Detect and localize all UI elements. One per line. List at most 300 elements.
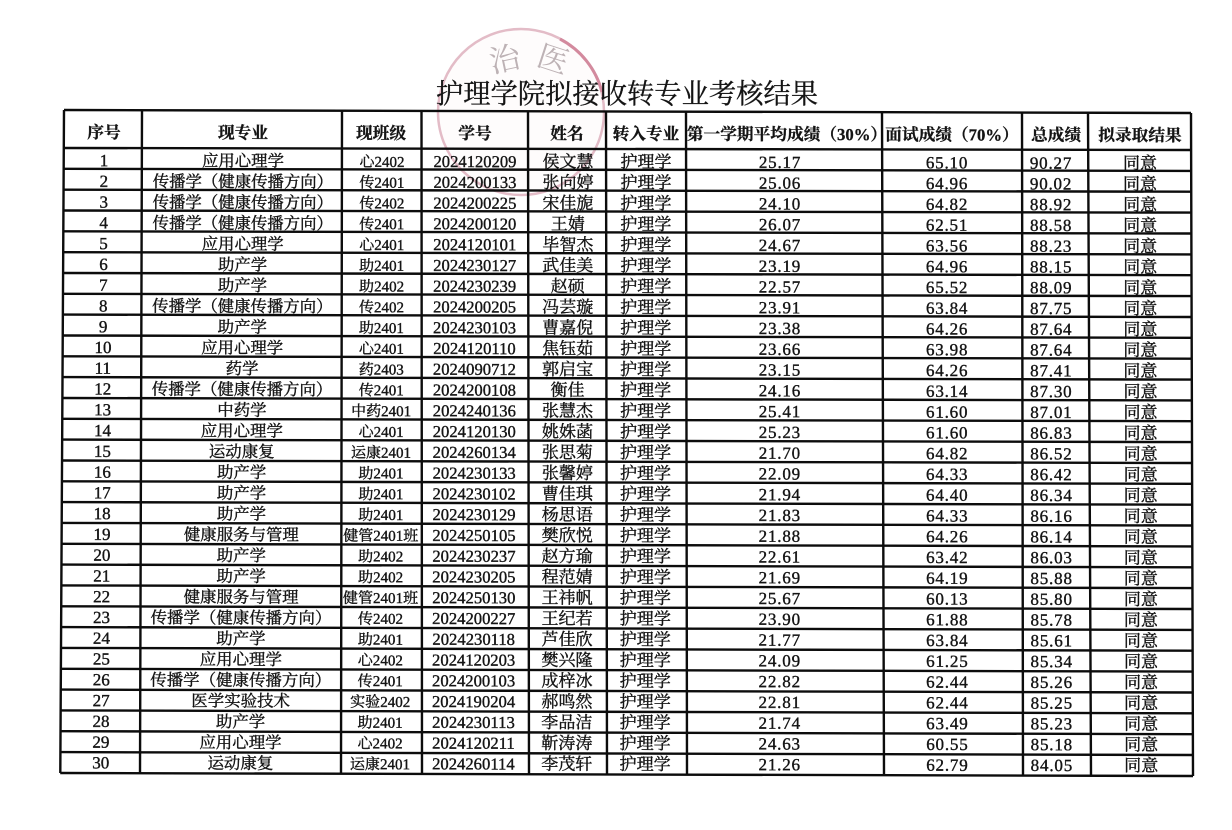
row 30: 30 [92, 753, 109, 772]
row 7: 同意 [1123, 278, 1157, 298]
row 12: 12 [94, 380, 111, 399]
row 16: 22.09 [759, 464, 801, 484]
row 17: 护理学 [620, 485, 671, 504]
row 30 [92, 753, 1158, 775]
row 25 [93, 650, 1158, 671]
row 2: 64.96 [926, 174, 968, 193]
row 27: 护理学 [620, 693, 671, 712]
row 14: 护理学 [620, 422, 671, 442]
row 16 [94, 462, 1158, 484]
row 25: 心2402 [358, 652, 403, 669]
row 14: 2024120130 [433, 422, 516, 441]
row 13: 中药学 [217, 401, 267, 420]
row 29: 85.18 [1031, 735, 1073, 754]
header row: 学号 [458, 124, 492, 143]
row 20: 22.61 [759, 548, 801, 567]
official seal: 治 [486, 39, 525, 80]
row 2: 传播学（健康传播方向） [153, 172, 333, 191]
row 19: 樊欣悦 [542, 526, 593, 545]
row 1: 护理学 [621, 152, 671, 172]
row 5: 2024120101 [433, 235, 516, 254]
row 6: 武佳美 [542, 256, 593, 275]
row 1: 侯文慧 [543, 152, 593, 171]
row 25: 2024120203 [432, 650, 515, 670]
row 28: 85.23 [1031, 714, 1073, 733]
row 17: 86.34 [1030, 486, 1073, 505]
row 15 [94, 442, 1158, 464]
row 21: 护理学 [620, 568, 671, 587]
row 17: 17 [94, 483, 111, 502]
row 3: 2024200225 [433, 194, 516, 213]
row 3: 同意 [1123, 195, 1157, 214]
row 21: 21 [93, 566, 110, 585]
row 21: 同意 [1124, 569, 1158, 588]
row 2: 90.02 [1030, 174, 1072, 193]
row 25: 护理学 [620, 651, 671, 670]
row 28: 同意 [1124, 715, 1158, 734]
row 10: 87.64 [1030, 341, 1072, 360]
row 12: 63.14 [926, 382, 968, 401]
row 29: 靳涛涛 [541, 734, 592, 753]
row 25: 樊兴隆 [541, 651, 593, 670]
row 1: 同意 [1123, 154, 1157, 173]
row 4: 4 [99, 213, 108, 232]
row 24: 助产学 [216, 629, 266, 648]
row 14: 25.23 [759, 423, 801, 442]
row 22: 健管2401班 [343, 590, 418, 607]
row 1: 2024120209 [434, 152, 516, 171]
row 10: 63.98 [926, 340, 968, 359]
row 21: 程范婧 [542, 568, 593, 587]
row 29: 同意 [1124, 735, 1158, 754]
row 19: 19 [93, 525, 111, 544]
row 3: 护理学 [620, 194, 671, 213]
row 8: 传播学（健康传播方向） [152, 297, 333, 316]
row 4 [99, 213, 1157, 235]
row 16: 64.33 [926, 465, 968, 484]
row 24: 63.84 [926, 631, 969, 650]
row 17: 64.40 [926, 486, 968, 505]
row 10: 护理学 [620, 339, 671, 359]
row 30: 2024260114 [432, 754, 515, 774]
row 3: 88.92 [1030, 195, 1072, 214]
row 16: 同意 [1124, 465, 1158, 484]
row 29: 心2402 [357, 735, 403, 752]
row 18: 杨思语 [542, 504, 593, 524]
row 12 [94, 380, 1157, 401]
row 28: 2024230113 [432, 713, 515, 732]
row 22: 85.80 [1030, 590, 1073, 609]
row 10 [94, 338, 1157, 360]
row 9: 23.38 [759, 319, 801, 338]
row 6: 2024230127 [433, 256, 516, 275]
results table [60, 110, 1193, 776]
row 25: 61.25 [926, 652, 969, 671]
row 11: 11 [95, 359, 111, 378]
row 15: 运动康复 [209, 442, 275, 461]
row 21: 助产学 [217, 567, 266, 586]
row 30: 21.26 [758, 755, 801, 774]
row 11: 64.26 [926, 361, 968, 380]
row 22: 22 [93, 587, 110, 606]
row 7: 赵硕 [551, 277, 586, 296]
row 21 [93, 566, 1158, 588]
row 18: 助2401 [358, 507, 403, 524]
row 8: 护理学 [620, 298, 671, 317]
row 26: 2024200103 [432, 671, 515, 690]
row 29: 2024120211 [432, 734, 515, 753]
row 2: 25.06 [759, 174, 801, 193]
row 20: 63.42 [926, 548, 968, 567]
header row: 面试成绩（70%） [885, 124, 1019, 145]
row 20: 助2402 [358, 548, 403, 566]
row 30: 84.05 [1031, 756, 1073, 775]
header row: 序号 [87, 123, 121, 142]
row 30: 同意 [1124, 756, 1158, 775]
row 20: 同意 [1124, 548, 1158, 568]
row 2: 同意 [1123, 175, 1157, 194]
row 10: 10 [94, 338, 112, 357]
row 4: 同意 [1123, 216, 1157, 235]
row 21: 21.69 [759, 568, 801, 587]
row 21: 85.88 [1030, 569, 1073, 588]
row 22: 2024250130 [432, 588, 515, 607]
row 5: 5 [99, 234, 108, 253]
row 12: 2024200108 [433, 380, 516, 400]
row 26: 护理学 [620, 672, 671, 691]
row 8: 2024200205 [433, 297, 516, 317]
row 22: 健康服务与管理 [184, 587, 299, 607]
row 21: 助2402 [358, 569, 403, 586]
row 14: 姚姝菡 [542, 421, 593, 441]
row 3: 24.10 [759, 194, 801, 214]
row 27: 同意 [1124, 694, 1158, 713]
row 6: 64.96 [926, 257, 968, 276]
row 4: 传2401 [359, 216, 404, 233]
row 20: 赵方瑜 [542, 547, 593, 566]
header row: 第一学期平均成绩（30%） [687, 124, 887, 144]
row 18 [94, 503, 1158, 526]
row 11: 2024090712 [433, 360, 516, 379]
row 29: 60.55 [926, 735, 969, 754]
row 26: 22.82 [759, 672, 801, 691]
row 12: 衡佳 [551, 381, 585, 400]
row 24: 24 [93, 629, 110, 648]
row 11: 药学 [226, 359, 259, 378]
row 19: 健管2401班 [343, 528, 418, 545]
row 17: 同意 [1124, 486, 1158, 505]
row 20: 2024230237 [432, 547, 516, 566]
row 4: 88.58 [1030, 216, 1072, 235]
row 14: 心2401 [359, 424, 404, 441]
row 27: 实验2402 [350, 694, 410, 711]
row 1 [100, 151, 1157, 173]
row 27: 85.25 [1031, 694, 1073, 713]
row 26: 26 [93, 670, 110, 689]
row 16: 助2401 [358, 465, 403, 482]
row 3: 64.82 [926, 195, 968, 214]
row 24: 助2401 [358, 632, 403, 649]
row 9: 87.64 [1030, 320, 1072, 339]
row 16: 护理学 [620, 464, 671, 483]
row 24: 芦佳欣 [541, 630, 593, 649]
row 13: 张慧杰 [542, 402, 594, 421]
row 9: 同意 [1123, 320, 1157, 339]
row 14: 61.60 [926, 423, 968, 442]
row 5: 心2401 [359, 237, 404, 254]
row 27: 27 [93, 691, 110, 710]
row 18: 2024230129 [432, 505, 516, 524]
row 3: 3 [100, 193, 108, 212]
row 16: 86.42 [1030, 465, 1073, 484]
row 15: 运康2401 [351, 444, 411, 462]
row 8: 同意 [1123, 299, 1157, 318]
row 22 [93, 587, 1158, 609]
row 22: 同意 [1124, 590, 1158, 609]
row 23: 传播学（健康传播方向） [151, 608, 331, 628]
row 19: 21.88 [759, 527, 801, 546]
row 12: 同意 [1123, 382, 1157, 401]
row 1: 65.10 [926, 153, 968, 172]
row 28: 28 [92, 712, 110, 731]
row 4: 26.07 [759, 215, 801, 234]
row 8: 63.84 [926, 299, 968, 318]
row 18: 86.16 [1030, 507, 1073, 526]
row 13: 61.60 [926, 403, 968, 422]
row 19: 86.14 [1030, 527, 1073, 547]
row 8: 87.75 [1030, 299, 1072, 318]
row 8: 传2402 [359, 299, 404, 316]
row 13: 87.01 [1030, 403, 1073, 422]
row 30: 62.79 [926, 756, 969, 775]
row 1: 1 [100, 151, 108, 170]
row 5 [99, 234, 1157, 256]
header row: 总成绩 [1031, 125, 1081, 145]
row 5: 88.23 [1030, 237, 1072, 256]
row 11: 同意 [1123, 362, 1157, 381]
row 23: 传2402 [358, 611, 403, 628]
row 2 [100, 172, 1157, 194]
row 14 [94, 420, 1158, 443]
row 9: 护理学 [620, 319, 671, 338]
row 26: 同意 [1124, 673, 1158, 692]
row 30: 运动康复 [207, 754, 273, 773]
row 27 [93, 691, 1158, 713]
row 13: 同意 [1124, 403, 1158, 422]
row 17: 2024230102 [433, 484, 516, 504]
row 9 [99, 317, 1157, 339]
row 27: 22.81 [759, 693, 801, 712]
row 12: 护理学 [620, 381, 671, 400]
row 7: 2024230239 [433, 277, 516, 296]
row 28: 李品洁 [541, 713, 592, 732]
row 28: 助产学 [216, 712, 265, 731]
row 17 [94, 483, 1158, 505]
row 26: 62.44 [926, 673, 969, 692]
row 7 [99, 276, 1157, 298]
row 30: 李茂轩 [541, 755, 592, 774]
row 14: 86.83 [1030, 424, 1073, 443]
row 2: 传2401 [359, 175, 404, 192]
row 13: 13 [94, 400, 111, 419]
row 6: 助2401 [359, 258, 404, 275]
row 19: 健康服务与管理 [184, 525, 299, 544]
row 24: 21.77 [759, 631, 801, 650]
row 6: 23.19 [759, 257, 801, 276]
row 11: 药2403 [359, 360, 404, 379]
row 29: 应用心理学 [199, 733, 282, 752]
row 8: 8 [99, 296, 107, 315]
row 30: 护理学 [620, 755, 671, 774]
header row: 姓名 [550, 123, 584, 143]
row 20 [93, 546, 1158, 568]
row 5: 63.56 [926, 236, 968, 255]
header row: 现班级 [356, 124, 406, 143]
row 16: 张馨婷 [542, 463, 593, 483]
row 28: 63.49 [926, 714, 969, 733]
row 29: 29 [92, 733, 109, 752]
row 8: 23.91 [759, 298, 801, 317]
row 5: 24.67 [759, 236, 801, 255]
row 13: 护理学 [620, 402, 671, 421]
row 15: 86.52 [1030, 444, 1073, 463]
row 7: 65.52 [926, 278, 968, 297]
row 26: 成梓冰 [541, 672, 593, 691]
row 9: 助产学 [218, 318, 267, 337]
row 10: 23.66 [759, 340, 801, 359]
row 18: 助产学 [217, 504, 266, 524]
row 6: 同意 [1123, 258, 1157, 277]
official seal: 医 [533, 38, 573, 81]
row 23: 2024200227 [432, 609, 515, 628]
header row: 拟录取结果 [1098, 125, 1182, 145]
row 7: 88.09 [1030, 278, 1072, 297]
row 23: 23.90 [759, 610, 801, 629]
row 27: 62.44 [926, 693, 969, 712]
row 23: 23 [93, 608, 110, 627]
row 23: 王纪若 [542, 609, 593, 628]
row 17: 21.94 [759, 485, 801, 504]
row 12: 87.30 [1030, 382, 1072, 401]
row 24 [93, 629, 1158, 651]
row 20: 86.03 [1030, 548, 1073, 567]
row 25: 85.34 [1031, 652, 1073, 671]
row 8: 冯芸璇 [542, 298, 593, 317]
row 17: 曹佳琪 [542, 485, 594, 504]
row 20: 20 [93, 546, 110, 565]
row 23: 85.78 [1030, 611, 1073, 630]
row 15: 张思菊 [542, 443, 593, 462]
row 18: 18 [94, 504, 111, 523]
row 7: 22.57 [759, 277, 801, 297]
row 1: 心2402 [359, 154, 405, 171]
row 22: 25.67 [759, 589, 801, 608]
row 4: 传播学（健康传播方向） [153, 214, 333, 233]
row 16: 2024230133 [433, 464, 516, 483]
row 7: 助2402 [359, 278, 404, 296]
row 15: 21.70 [759, 444, 801, 463]
row 9: 曹嘉倪 [542, 318, 593, 338]
row 5: 应用心理学 [202, 234, 284, 254]
row 27: 郝鸣然 [541, 692, 593, 711]
header row [87, 122, 1182, 145]
header row: 现专业 [218, 122, 268, 143]
row 16: 助产学 [217, 463, 266, 482]
row 5: 护理学 [620, 236, 671, 255]
row 10: 同意 [1123, 341, 1157, 360]
row 9: 助2401 [359, 320, 404, 337]
row 9: 64.26 [926, 319, 968, 339]
row 20: 护理学 [620, 547, 671, 566]
row 3: 传播学（健康传播方向） [153, 193, 333, 212]
row 1: 25.17 [759, 153, 801, 172]
row 19: 护理学 [620, 526, 671, 545]
row 26: 传2401 [358, 673, 403, 690]
header row: 转入专业 [613, 123, 680, 144]
row 27: 2024190204 [432, 692, 516, 711]
row 26: 85.26 [1031, 673, 1073, 692]
row 19: 2024250105 [432, 526, 516, 545]
row 7: 助产学 [218, 276, 267, 295]
row 25: 应用心理学 [200, 650, 282, 669]
row 15: 64.82 [926, 444, 968, 463]
row 28: 助2401 [358, 715, 403, 732]
row 25: 25 [93, 650, 110, 669]
row 15: 同意 [1124, 445, 1158, 464]
row 24: 护理学 [620, 630, 671, 649]
title: 护理学院拟接收转专业考核结果 [436, 79, 818, 109]
row 6 [99, 255, 1157, 277]
row 10: 心2401 [359, 341, 404, 358]
row 6: 助产学 [218, 255, 267, 274]
row 24: 2024230118 [432, 630, 515, 649]
row 25: 同意 [1124, 652, 1158, 671]
row 15: 2024260134 [433, 443, 516, 462]
row 9: 2024230103 [433, 318, 516, 337]
row 12: 24.16 [759, 381, 801, 400]
row 10: 2024120110 [433, 339, 516, 358]
row 27: 医学实验技术 [191, 691, 290, 711]
row 18: 64.33 [926, 506, 968, 525]
row 18: 护理学 [620, 506, 671, 525]
row 13: 中药2401 [351, 402, 411, 420]
row 24: 同意 [1124, 632, 1158, 651]
row 7: 护理学 [620, 277, 671, 296]
row 24: 85.61 [1030, 631, 1073, 650]
row 15: 15 [94, 442, 111, 461]
row 13 [94, 400, 1158, 422]
row 14: 应用心理学 [201, 421, 283, 441]
row 5: 同意 [1123, 237, 1157, 256]
row 28 [92, 712, 1158, 734]
row 23: 61.88 [926, 610, 968, 629]
row 22: 护理学 [620, 589, 671, 608]
row 4: 护理学 [620, 215, 671, 234]
row 11: 郭启宝 [542, 360, 593, 379]
row 2: 护理学 [620, 173, 671, 192]
row 21: 2024230205 [432, 567, 515, 587]
row 2: 2 [100, 172, 108, 191]
row 25: 24.09 [759, 651, 801, 670]
row 18: 21.83 [759, 506, 801, 525]
row 4: 王婧 [551, 215, 585, 234]
row 6: 护理学 [620, 256, 671, 275]
row 23 [93, 608, 1158, 630]
row 2: 张向婷 [542, 173, 593, 192]
row 9: 9 [99, 317, 107, 336]
row 3: 宋佳旎 [542, 194, 593, 213]
row 16: 16 [94, 463, 111, 482]
